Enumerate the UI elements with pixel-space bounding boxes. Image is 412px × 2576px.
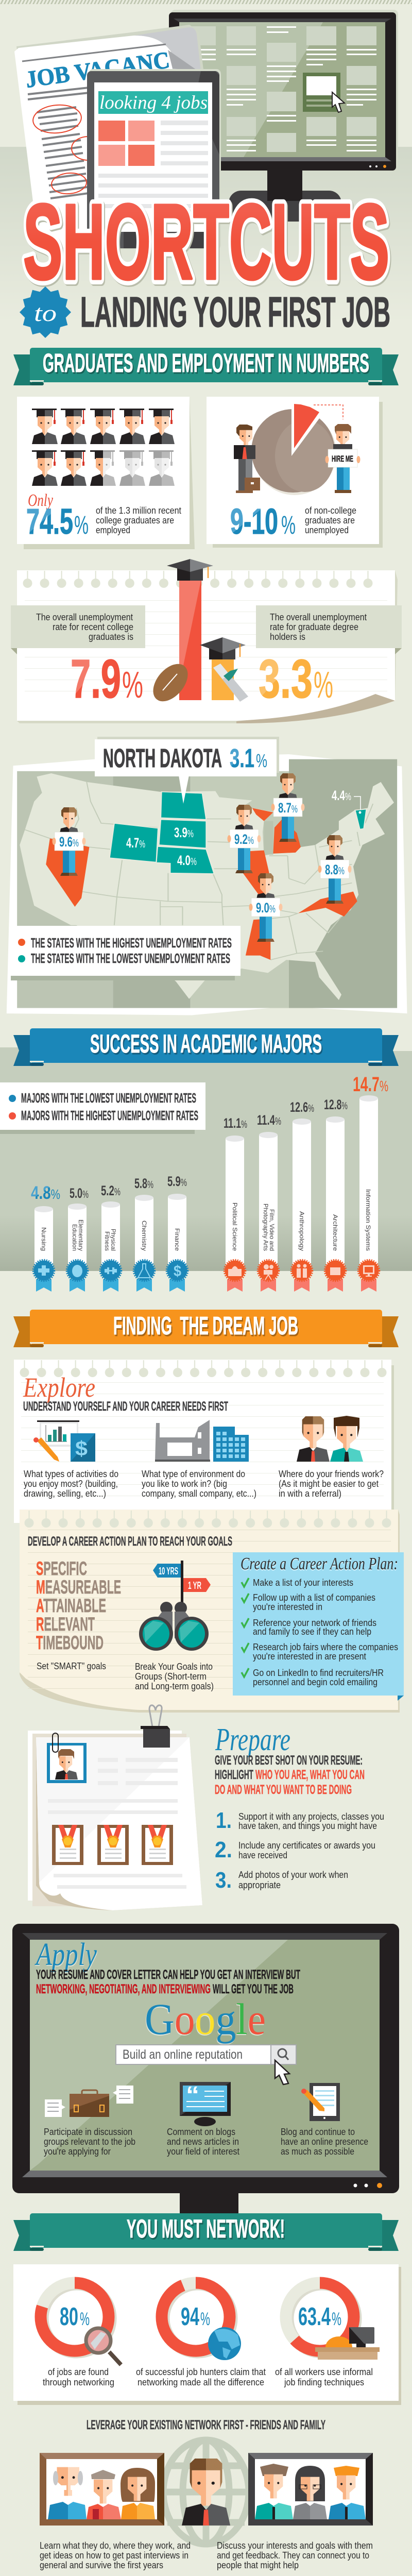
icon: football bbox=[146, 657, 195, 708]
networking captions: job finding techniques bbox=[284, 2377, 364, 2387]
panel: 9-10% unemployed bbox=[207, 397, 383, 548]
major names: Finance bbox=[174, 1228, 181, 1251]
employed caption bbox=[96, 505, 181, 535]
script heading: apply: Apply bbox=[35, 1937, 97, 1972]
right tag bbox=[256, 605, 402, 654]
family: grandparent bbox=[48, 2467, 87, 2519]
employed man with briefcase bbox=[234, 425, 260, 493]
apply statement bbox=[36, 1968, 300, 1996]
banner: finding the dream job bbox=[13, 1310, 399, 1347]
major names: Film, Video and bbox=[268, 1209, 276, 1251]
goals caption: Groups (Short-term bbox=[135, 1671, 207, 1682]
step 1 bbox=[216, 1808, 384, 1833]
map legend: THE STATES WITH THE HIGHEST UNEMPLOYMENT RATES bbox=[31, 935, 232, 951]
discussion text: groups relevant to the job bbox=[44, 2137, 135, 2147]
pie chart bbox=[251, 404, 343, 495]
icon: binoculars bbox=[139, 1602, 209, 1651]
icon: worker at desk bbox=[315, 2327, 380, 2360]
step 1: 1. bbox=[216, 1808, 232, 1833]
right tag: The overall unemployment bbox=[270, 612, 367, 622]
low rate labels: 4.7% bbox=[126, 835, 145, 851]
goals caption: and Long-term goals) bbox=[135, 1681, 214, 1691]
icon: factory and office bbox=[155, 1420, 249, 1462]
online presence text bbox=[281, 2127, 368, 2157]
map legend bbox=[11, 926, 241, 980]
discuss caption bbox=[217, 2540, 373, 2570]
environment question: What type of environment do bbox=[142, 1469, 245, 1479]
major names: Photography Arts bbox=[262, 1204, 269, 1251]
smart goals acronym: MEASUREABLE bbox=[36, 1577, 121, 1598]
left tag: graduates is bbox=[89, 632, 133, 642]
networking captions: of jobs are found bbox=[48, 2367, 109, 2377]
left tag: The overall unemployment bbox=[36, 612, 133, 622]
major names: Information Systems bbox=[365, 1189, 372, 1251]
discuss caption: and get feedback. They can connect you to bbox=[217, 2550, 369, 2561]
goals caption bbox=[135, 1662, 214, 1691]
section: success in academic majors bbox=[0, 1028, 412, 1347]
icon: blog comment monitor: “ bbox=[186, 2081, 199, 2108]
rate values: 12.6% bbox=[290, 1099, 314, 1115]
subheading: UNDERSTAND YOURSELF AND YOUR CAREER NEEDS FIRST bbox=[23, 1399, 228, 1414]
background band bbox=[0, 1047, 412, 1271]
blog comment text bbox=[167, 2127, 239, 2157]
person sign: 9.0% bbox=[249, 873, 282, 942]
prepare statement: HIGHLIGHT bbox=[215, 1768, 253, 1782]
stat: 9-10%: 9-10 bbox=[230, 501, 278, 541]
scroll bars bbox=[226, 1095, 378, 1266]
blog comment text: and news articles in bbox=[167, 2137, 239, 2147]
unemployed caption: graduates are bbox=[305, 515, 355, 526]
desktop monitor bbox=[169, 10, 398, 222]
person sign: 8.7% bbox=[271, 773, 305, 842]
step 3: 3. bbox=[215, 1868, 232, 1893]
step 1: have taken, and things you might have bbox=[238, 1821, 377, 1831]
environment question bbox=[142, 1469, 256, 1499]
step 3: appropriate bbox=[238, 1880, 281, 1890]
rate values: 14.7% bbox=[353, 1073, 388, 1096]
icon: nursing cross bbox=[38, 1265, 49, 1276]
environment question: company, small company, etc...) bbox=[142, 1488, 256, 1499]
friends question bbox=[279, 1469, 384, 1499]
person sign: 9.6%: 9.6% bbox=[59, 834, 79, 850]
family: mother bbox=[121, 2468, 155, 2519]
graduates icon array bbox=[32, 409, 175, 486]
checklist text: Follow up with a list of companies bbox=[253, 1592, 375, 1603]
donut: 63.4% bbox=[286, 2283, 356, 2352]
colleague: woman with glasses bbox=[293, 2466, 327, 2519]
map: united states bbox=[7, 754, 407, 1015]
section: explore bbox=[14, 1360, 404, 1713]
networking captions bbox=[43, 2367, 373, 2387]
only label: Only bbox=[28, 491, 54, 510]
rate values: 12.8% bbox=[324, 1097, 348, 1112]
major names: Political Science bbox=[231, 1202, 238, 1251]
signpost: 10 YRS bbox=[159, 1566, 178, 1577]
paperclip bbox=[53, 1733, 58, 1752]
stat: 63.4%: % bbox=[332, 2309, 341, 2329]
major names bbox=[231, 1189, 372, 1251]
red circled listings bbox=[32, 103, 106, 195]
friends question: Where do your friends work? bbox=[279, 1469, 384, 1479]
networking captions: of all workers use informal bbox=[275, 2367, 373, 2377]
person sign: 9.0%: 9.0% bbox=[256, 900, 276, 916]
friends question: (As it might be easier to get bbox=[279, 1479, 379, 1489]
discussion text: Participate in discussion bbox=[44, 2127, 132, 2137]
stat: 7.9%: % bbox=[122, 665, 143, 706]
monitor text lines bbox=[186, 26, 376, 151]
learn caption: Learn what they do, where they work, and bbox=[40, 2540, 191, 2551]
low rate labels bbox=[126, 788, 362, 868]
step 2: 2. bbox=[215, 1837, 232, 1862]
rate values: 5.8% bbox=[134, 1176, 153, 1191]
headline: job vacancy: JOB VACANC bbox=[24, 46, 171, 93]
section: header bbox=[0, 0, 412, 338]
icon: flask bbox=[138, 1264, 150, 1278]
rate values: 11.4% bbox=[257, 1112, 281, 1128]
rate values: 5.0% bbox=[70, 1185, 89, 1201]
stat: 80%: 80 bbox=[60, 2303, 78, 2331]
icon: office building bbox=[330, 1267, 340, 1275]
family: father bbox=[87, 2470, 121, 2519]
blog comment text: your field of interest bbox=[167, 2146, 239, 2157]
step 2: have received bbox=[238, 1850, 287, 1860]
networking captions: of successful job hunters claim that bbox=[136, 2367, 266, 2377]
checklist text: you're interested in bbox=[253, 1602, 322, 1612]
family photo frame bbox=[40, 2453, 164, 2526]
learn caption: get ideas on how to get past interviews in bbox=[40, 2550, 188, 2561]
icon: discussion briefcase bbox=[45, 2086, 133, 2117]
mouse cursor bbox=[332, 92, 345, 112]
person sign: 9.2%: 9.2% bbox=[234, 832, 254, 847]
central man bbox=[182, 2459, 230, 2526]
jobless man with hire me sign bbox=[325, 424, 360, 493]
discussion text bbox=[44, 2127, 135, 2157]
employed caption: employed bbox=[96, 525, 130, 535]
major names: Education bbox=[71, 1224, 78, 1251]
checklist text: and family to see if they can help bbox=[253, 1626, 371, 1637]
donut: 80% bbox=[41, 2283, 111, 2352]
step 2: Include any certificates or awards you bbox=[238, 1840, 375, 1851]
unemployed caption: unemployed bbox=[305, 525, 349, 535]
subheading: DEVELOP A CAREER ACTION PLAN TO REACH YOUR GOALS bbox=[28, 1534, 232, 1549]
smart goals acronym: ATTAINABLE bbox=[36, 1595, 106, 1616]
stat: 74.5%: 74.5 bbox=[26, 501, 73, 541]
major names: Physical bbox=[110, 1229, 117, 1251]
script heading: explore: Explore bbox=[23, 1372, 95, 1403]
blog comment text: Comment on blogs bbox=[167, 2127, 235, 2137]
step 3 bbox=[215, 1868, 348, 1893]
activities question: you enjoy most? (building, bbox=[24, 1479, 118, 1489]
icon: apple bbox=[72, 1265, 82, 1277]
colleague: blonde bbox=[329, 2466, 366, 2519]
panel: explore notepad bbox=[14, 1360, 394, 1523]
badge: to bbox=[20, 286, 71, 338]
smart caption: Set "SMART" goals bbox=[37, 1661, 106, 1671]
rate values bbox=[31, 1174, 187, 1203]
environment question: you like to work in? (big bbox=[142, 1479, 227, 1489]
globe background bbox=[163, 2440, 249, 2544]
stat: 80%: % bbox=[80, 2309, 90, 2329]
badge: to: to bbox=[34, 300, 57, 326]
checklist text: Go on LinkedIn to find recruiters/HR bbox=[253, 1668, 384, 1678]
left tag: rate for recent college bbox=[53, 622, 133, 632]
rate values bbox=[224, 1073, 388, 1131]
networking captions: through networking bbox=[43, 2377, 114, 2387]
stat: 74.5%: % bbox=[74, 511, 89, 539]
stat: 7.9%: 7.9 bbox=[71, 649, 121, 709]
major names: Nursing bbox=[40, 1227, 47, 1251]
looking 4 jobs banner bbox=[98, 91, 208, 114]
callout: north dakota: NORTH DAKOTA bbox=[103, 743, 222, 773]
learn caption bbox=[40, 2540, 191, 2570]
stat: 94%: % bbox=[200, 2309, 210, 2329]
colleague: teal shirt bbox=[255, 2464, 293, 2519]
smart goals acronym: RELEVANT bbox=[36, 1614, 95, 1635]
low rate labels: 3.9% bbox=[174, 825, 194, 840]
panel: network statistics bbox=[13, 2264, 401, 2405]
stat: 94%: 94 bbox=[181, 2303, 199, 2331]
icon: diploma bbox=[213, 664, 248, 702]
high unemployment states bbox=[46, 808, 357, 960]
networking captions: networking made all the difference bbox=[138, 2377, 264, 2387]
checklist text: personnel and begin cold emailing bbox=[253, 1677, 377, 1687]
person sign: 8.8% bbox=[318, 835, 351, 904]
majors legend: MAJORS WITH THE LOWEST UNEMPLOYMENT RATES bbox=[21, 1090, 196, 1106]
stat: 3.3%: % bbox=[314, 665, 333, 706]
icon: chart, book and pencil bbox=[33, 1420, 95, 1462]
rate values: 5.9% bbox=[167, 1174, 187, 1189]
online presence text: as much as possible bbox=[281, 2146, 354, 2157]
step 2 bbox=[215, 1837, 375, 1862]
checklist text: Make a list of your interests bbox=[253, 1578, 353, 1588]
activities question: drawing, selling, etc...) bbox=[24, 1488, 106, 1499]
callout: north dakota: % bbox=[256, 750, 267, 771]
right tag: rate for graduate degree bbox=[270, 622, 358, 632]
banner script text: looking 4 jobs bbox=[99, 92, 208, 113]
major names: Architecture bbox=[332, 1214, 339, 1251]
stat: 3.3%: 3.3 bbox=[259, 649, 313, 709]
low rate labels: 4.4% bbox=[332, 788, 351, 803]
icon: magnifier bbox=[86, 2328, 121, 2365]
major names: Fitness bbox=[104, 1231, 111, 1251]
icon: movie camera bbox=[264, 1264, 273, 1280]
mouse cursor bbox=[275, 2060, 289, 2084]
majors legend bbox=[0, 1082, 205, 1134]
icon: chart, book and pencil: $ bbox=[75, 1437, 88, 1460]
map legend: THE STATES WITH THE LOWEST UNEMPLOYMENT RATES bbox=[31, 951, 230, 966]
red bar with mortarboard bbox=[167, 559, 213, 700]
chart: majors with lowest unemployment bbox=[31, 1174, 187, 1292]
section: prepare resume bbox=[28, 1705, 384, 1910]
activities question bbox=[24, 1469, 118, 1499]
orange bar with mortarboard bbox=[200, 637, 246, 700]
panel: unemployment comparison notepad bbox=[11, 559, 402, 723]
major names: Anthropology bbox=[298, 1211, 305, 1251]
discuss caption: Discuss your interests and goals with them bbox=[217, 2540, 373, 2551]
right tag: holders is bbox=[270, 632, 305, 642]
prepare statement bbox=[215, 1753, 365, 1797]
low unemployment states bbox=[110, 792, 366, 874]
icon: globe bbox=[208, 2327, 241, 2360]
person sign: 8.8%: 8.8% bbox=[325, 862, 345, 877]
script heading: prepare: Prepare bbox=[215, 1722, 290, 1757]
activities question: What types of activities do bbox=[24, 1469, 118, 1479]
icon: people bbox=[297, 1264, 307, 1278]
icon: blog comment monitor bbox=[180, 2081, 231, 2126]
resume lines bbox=[48, 1758, 186, 1889]
scroll bars bbox=[35, 1194, 186, 1266]
step 1: Support it with any projects, classes you bbox=[238, 1811, 384, 1822]
online presence text: have an online presence bbox=[281, 2137, 368, 2147]
signpost bbox=[153, 1561, 211, 1604]
person sign: 9.6% bbox=[53, 807, 85, 876]
online presence text: Blog and continue to bbox=[281, 2127, 355, 2137]
goals caption: Break Your Goals into bbox=[135, 1662, 213, 1672]
major names: Chemistry bbox=[141, 1221, 148, 1251]
friends question: in with a referral) bbox=[279, 1488, 341, 1499]
employed caption: college graduates are bbox=[96, 515, 174, 526]
rate values: 11.1% bbox=[224, 1115, 247, 1131]
callout: north dakota bbox=[95, 737, 279, 804]
major names bbox=[40, 1219, 181, 1251]
checklist text bbox=[253, 1578, 398, 1687]
icon: capitol bbox=[228, 1266, 242, 1276]
banner: you must network: YOU MUST NETWORK! bbox=[127, 2214, 285, 2243]
chart: majors with highest unemployment bbox=[224, 1073, 388, 1292]
callout: north dakota: 3.1 bbox=[230, 743, 254, 773]
binder clip bbox=[141, 1705, 170, 1748]
section: graduates and employment bbox=[11, 348, 402, 723]
icon: two friends bbox=[297, 1416, 363, 1462]
selected listing bbox=[303, 73, 340, 112]
person sign: 9.2% bbox=[228, 805, 261, 873]
smart goals acronym: SPECIFIC bbox=[36, 1558, 87, 1579]
smart goals acronym: TIMEBOUND bbox=[36, 1632, 104, 1653]
red ribbons with icons bbox=[225, 1260, 379, 1292]
resume paper stack bbox=[28, 1705, 202, 1910]
discussion text: you're applying for bbox=[44, 2146, 111, 2157]
apply statement: WILL GET YOU THE JOB bbox=[213, 1982, 294, 1996]
top hatch strip bbox=[0, 0, 412, 4]
desk band bbox=[0, 147, 412, 322]
signpost: 1 YR bbox=[188, 1580, 201, 1591]
majors legend: MAJORS WITH THE HIGHEST UNEMPLOYMENT RATES bbox=[21, 1108, 198, 1123]
monitor frame bbox=[12, 1924, 399, 2215]
smart goals acronym bbox=[36, 1558, 121, 1653]
monitor buttons bbox=[369, 165, 386, 168]
discuss caption: people that might help bbox=[217, 2560, 299, 2570]
employed caption: of the 1.3 million recent bbox=[96, 505, 181, 516]
step 3: Add photos of your work when bbox=[238, 1870, 348, 1880]
low rate labels: 4.0% bbox=[177, 853, 197, 868]
blue ribbons with icons bbox=[33, 1260, 187, 1292]
icon: dollar: $ bbox=[174, 1263, 181, 1280]
left tag bbox=[11, 605, 145, 654]
banner: success in academic majors bbox=[13, 1028, 399, 1066]
tablet grey lines bbox=[98, 121, 208, 208]
learn caption: general and survive the first years bbox=[40, 2560, 163, 2570]
google logo: Google bbox=[145, 1994, 266, 2044]
checklist marks bbox=[242, 1578, 249, 1677]
rate values: 5.2% bbox=[101, 1183, 121, 1198]
colleagues photo frame bbox=[248, 2453, 373, 2526]
donut: 94% bbox=[162, 2283, 232, 2352]
unemployed caption: of non-college bbox=[305, 505, 356, 516]
section: unemployment map bbox=[7, 737, 407, 1015]
stat: 9-10%: % bbox=[281, 511, 296, 539]
panel: career action plan notepad bbox=[20, 1510, 404, 1713]
search box: Build an online reputation bbox=[123, 2047, 243, 2062]
resume photo bbox=[47, 1743, 87, 1783]
person sign: 8.7%: 8.7% bbox=[278, 800, 298, 816]
unemployed caption bbox=[305, 505, 356, 535]
section: you must network bbox=[0, 2213, 412, 2576]
checklist text: Reference your network of friends bbox=[253, 1618, 376, 1628]
icon: dumbbell bbox=[105, 1267, 117, 1274]
job vacancy newspaper bbox=[14, 25, 219, 247]
stat: 63.4%: 63.4 bbox=[298, 2303, 331, 2331]
rate values: 4.8% bbox=[31, 1183, 60, 1203]
tablet red squares bbox=[98, 121, 154, 166]
jobless man with hire me sign: HIRE ME bbox=[332, 454, 353, 464]
icon: tablet and pencil bbox=[301, 2083, 340, 2121]
certificates bbox=[52, 1825, 173, 1865]
checklist text: you're interested in are present bbox=[253, 1651, 366, 1662]
icon: computer bbox=[363, 1265, 374, 1277]
panel: create a career action plan bbox=[233, 1552, 404, 1701]
apply statement: NETWORKING, NEGOTIATING, AND INTERVIEWING bbox=[36, 1982, 211, 1996]
tablet bbox=[87, 69, 221, 249]
panel: 74.5% employed bbox=[17, 397, 195, 549]
monitor job listing thumbnails bbox=[186, 26, 376, 152]
banner: you must network bbox=[13, 2213, 399, 2251]
search box bbox=[116, 2045, 296, 2064]
section: apply monitor bbox=[12, 1924, 399, 2215]
major names: Elementary bbox=[77, 1219, 84, 1251]
